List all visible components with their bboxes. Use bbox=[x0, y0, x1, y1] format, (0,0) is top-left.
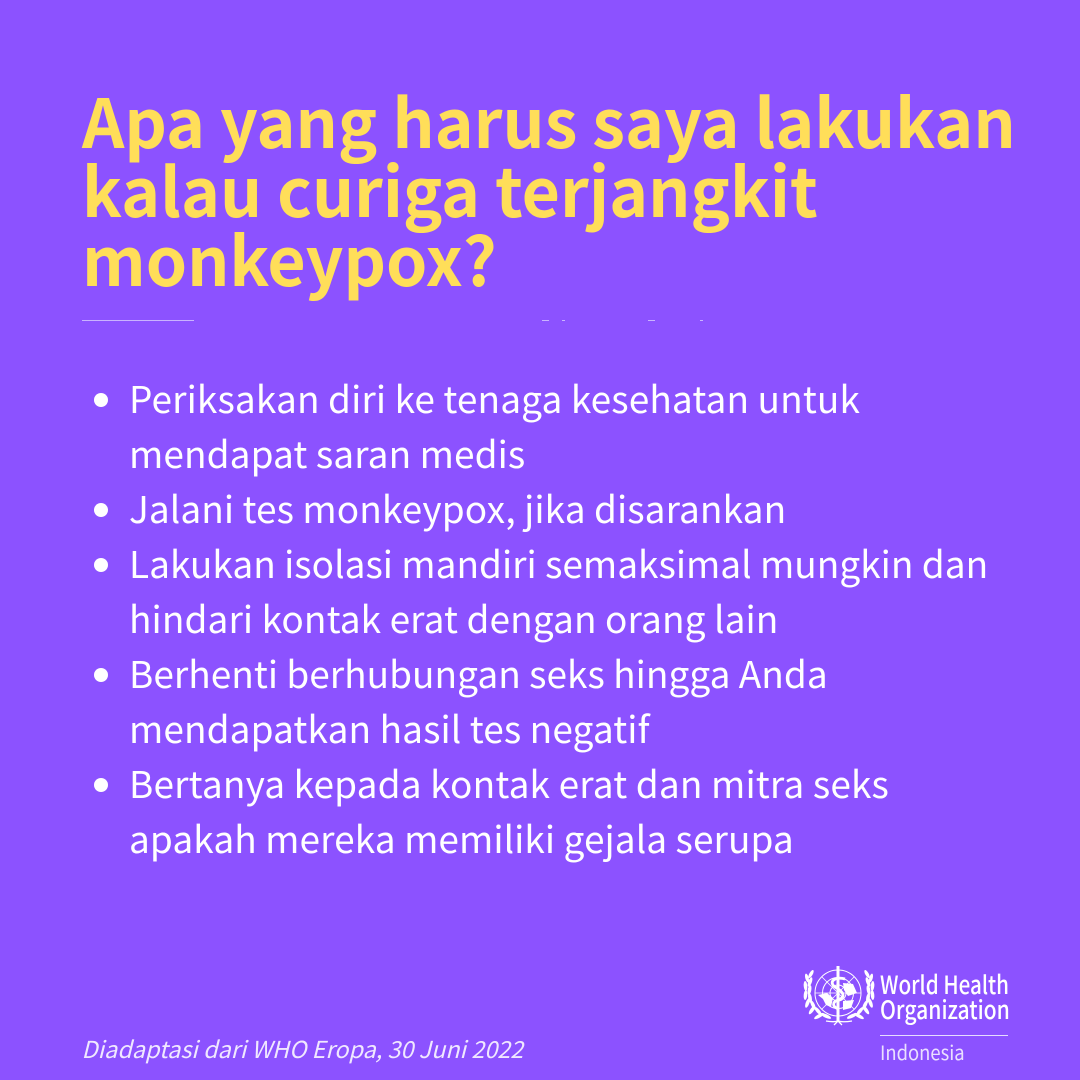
bullet 3 bbox=[94, 535, 988, 644]
logo country label: Indonesia bbox=[880, 1037, 965, 1066]
bullet 5 bbox=[94, 755, 889, 864]
title: kalau curiga terjangkit bbox=[82, 140, 818, 237]
logo wordmark: World Health bbox=[880, 966, 1009, 1002]
icon: WHO emblem bbox=[804, 966, 874, 1026]
clipped text remnant strokes bbox=[82, 320, 703, 321]
WHO logo bbox=[804, 966, 1010, 1066]
bullet 4: Berhenti berhubungan seks hingga Anda bbox=[129, 645, 828, 699]
title bbox=[82, 71, 1016, 306]
bullet 4 bbox=[94, 645, 828, 754]
WHO logo: Organization bbox=[880, 991, 1010, 1027]
bullet 1 bbox=[94, 370, 860, 479]
title: Apa yang harus saya lakukan bbox=[82, 71, 1016, 168]
bullet 3: hindari kontak erat dengan orang lain bbox=[129, 590, 778, 644]
bullet 3: Lakukan isolasi mandiri semaksimal mungkin dan bbox=[129, 535, 988, 589]
bullet 5: Bertanya kepada kontak erat dan mitra seks bbox=[129, 755, 889, 809]
bullet 5: apakah mereka memiliki gejala serupa bbox=[129, 810, 794, 864]
title: monkeypox? bbox=[82, 209, 497, 306]
bullet 4: mendapatkan hasil tes negatif bbox=[129, 700, 650, 754]
bullet list bbox=[94, 370, 988, 864]
bullet 1: Periksakan diri ke tenaga kesehatan untuk bbox=[129, 370, 860, 424]
source note: Diadaptasi dari WHO Eropa, 30 Juni 2022 bbox=[82, 1031, 523, 1065]
bullet 1: mendapat saran medis bbox=[129, 425, 525, 479]
logo divider bbox=[880, 1035, 1008, 1036]
bullet 2: Jalani tes monkeypox, jika disarankan bbox=[129, 480, 786, 534]
